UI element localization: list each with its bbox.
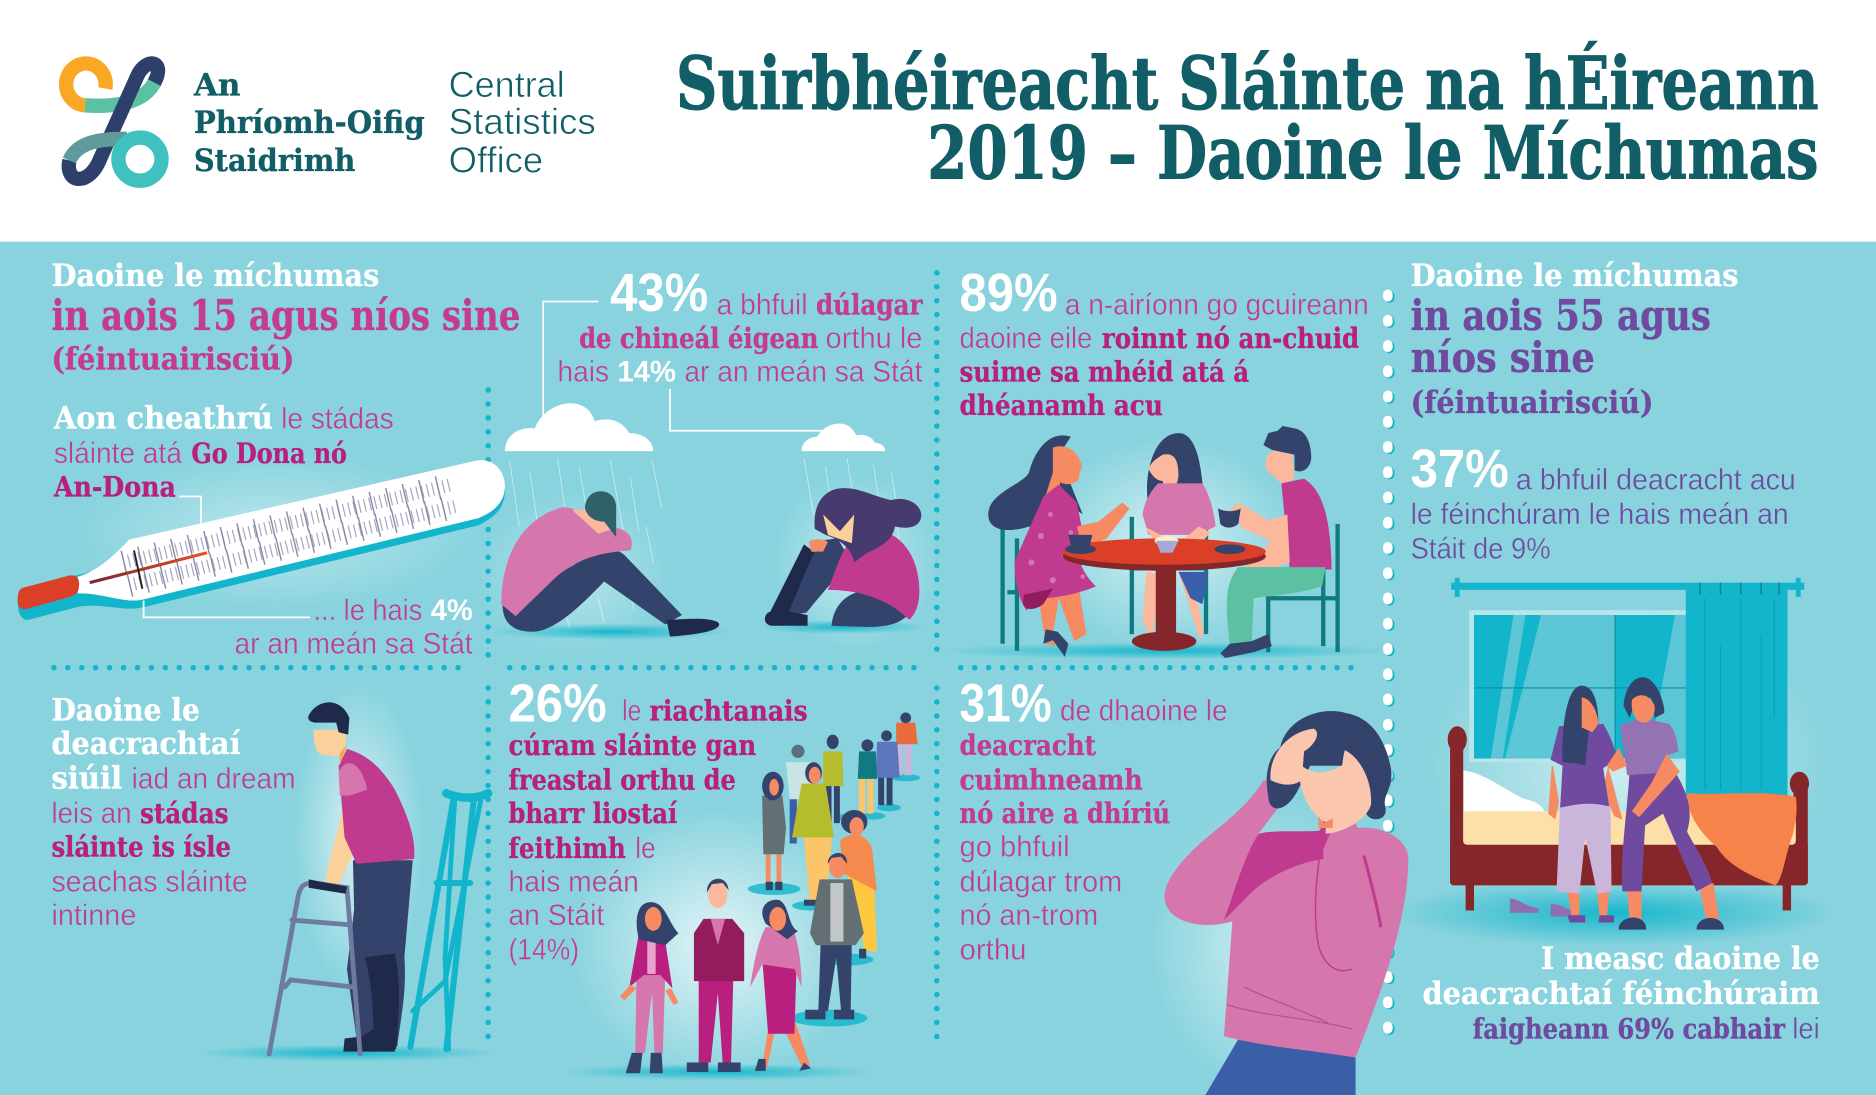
floor spots	[748, 774, 920, 1027]
curtain and rod	[1451, 578, 1804, 796]
text: self-care help: I measc daoine le	[1541, 941, 1820, 977]
illustration: three friends at a table	[939, 426, 1394, 659]
woman left	[988, 435, 1129, 657]
man right	[1218, 426, 1332, 658]
text: walking difficulties: sláinte is ísle	[51, 831, 231, 864]
front woman pink trousers	[620, 902, 678, 1073]
thermometer body	[18, 460, 505, 620]
text: one quarter health status: Go Dona nó	[191, 437, 347, 470]
front man suit	[687, 879, 744, 1072]
text: walking difficulties: leis an	[51, 797, 132, 830]
logo text: Irish: Phríomh-Oifig	[194, 105, 425, 141]
illustration: man with walking frame	[197, 702, 497, 1061]
text: 26 percent waiting lists: le	[622, 694, 641, 727]
text: 89 percent: roinnt nó an-chuid	[1102, 322, 1359, 355]
text: walking difficulties: seachas sláinte	[51, 865, 248, 898]
connector lines	[144, 497, 310, 617]
text: heading 55 and over: in aois 55 agus	[1411, 291, 1711, 340]
text: heading 55 and over: níos sine	[1411, 333, 1595, 382]
text: 26 percent waiting lists: cúram sláinte gan	[508, 729, 756, 762]
text: 26 percent waiting lists: an Stáit	[508, 899, 604, 932]
text: 89 percent: suime sa mhéid atá á	[960, 356, 1249, 389]
woman grey suit	[762, 772, 786, 890]
text: walking difficulties: intinne	[51, 899, 136, 932]
text: 43 percent depression: 14%	[617, 356, 676, 389]
man grey jacket	[805, 853, 864, 1019]
text: heading 15 and over: Daoine le míchumas	[51, 258, 379, 294]
title	[676, 41, 1819, 196]
bed	[1448, 726, 1809, 910]
illustration: woman hugging knees	[760, 488, 927, 634]
text: 89 percent: dhéanamh acu	[960, 389, 1163, 422]
text: walking difficulties: Daoine le	[51, 692, 200, 728]
text: 31 percent memory: deacracht	[960, 729, 1096, 762]
illustration: woman holding her head	[1165, 711, 1408, 1095]
woman orange top	[840, 810, 877, 958]
person	[347, 860, 413, 1047]
logo text: Irish	[193, 68, 425, 179]
front woman magenta skirt	[750, 900, 811, 1071]
logo text: English	[449, 65, 596, 180]
text: 31 percent memory: de dhaoine le	[1060, 694, 1228, 727]
text: heading 55 and over	[1411, 258, 1738, 421]
text: 89 percent: daoine eile	[960, 322, 1092, 355]
text: 43 percent depression: de chineál éigean	[579, 322, 818, 355]
illustration: queue of people	[562, 712, 920, 1080]
text: 89 percent: a n-airíonn go gcuireann	[1065, 289, 1369, 322]
text: compared with 4 percent: ar an meán sa Stát	[234, 627, 473, 660]
text: 43 percent depression	[558, 263, 923, 389]
text: 43 percent depression: a bhfuil	[717, 289, 808, 322]
text: heading 15 and over	[51, 258, 520, 378]
illustration: man sitting in rain	[491, 491, 730, 640]
text: 37 percent self-care: a bhfuil deacracht acu	[1516, 463, 1796, 496]
text: compared with 4 percent: ... le hais	[313, 594, 422, 627]
text: one quarter health status	[53, 400, 394, 504]
text: compared with 4 percent: 4%	[431, 594, 473, 627]
text: walking difficulties: stádas	[140, 797, 229, 830]
text: 26 percent waiting lists: feithimh	[508, 832, 626, 865]
text: 37 percent self-care: le féinchúram le hais meán an	[1411, 498, 1789, 531]
text: 37 percent self-care	[1411, 439, 1796, 566]
logo text: English: Central	[449, 65, 565, 105]
text: 37 percent self-care: 37%	[1411, 439, 1509, 499]
text: one quarter health status: Aon cheathrú	[53, 400, 273, 436]
text: walking difficulties: iad an dream	[132, 762, 296, 795]
text: 43 percent depression: ar an meán sa Stát	[684, 356, 922, 389]
panel: thermometer	[18, 460, 505, 620]
text: heading 15 and over: in aois 15 agus níos sine	[51, 291, 520, 340]
text: 26 percent waiting lists: freastal orthu de	[508, 764, 736, 797]
window	[1469, 610, 1687, 762]
text: one quarter health status: An-Dona	[53, 471, 176, 504]
text: 31 percent memory: nó aire a dhíriú	[960, 797, 1170, 830]
text: self-care help	[1423, 941, 1820, 1046]
white dotted divider	[1388, 294, 1390, 1048]
text: self-care help: lei	[1792, 1013, 1820, 1046]
logo text: English: Statistics	[449, 102, 596, 142]
text: 26 percent waiting lists: 26%	[508, 673, 607, 733]
text: 43 percent depression: orthu le	[826, 322, 922, 355]
woman helping	[1607, 677, 1724, 930]
text: 43 percent depression: 43%	[610, 263, 708, 323]
text: 26 percent waiting lists: (14%)	[508, 934, 579, 967]
back row people	[786, 712, 918, 843]
text: 43 percent depression: hais	[558, 356, 609, 389]
main panel background	[0, 242, 1876, 1095]
woman middle	[1143, 433, 1216, 640]
text: 31 percent memory	[960, 673, 1228, 967]
text: 31 percent memory: go bhfuil	[960, 831, 1070, 864]
logo text: Irish: An	[193, 68, 240, 104]
text: 26 percent waiting lists: le	[635, 832, 656, 865]
text: walking difficulties	[51, 692, 296, 932]
text: 31 percent memory: dúlagar trom	[960, 865, 1122, 898]
text: 89 percent	[960, 263, 1369, 422]
illustration: bedroom with two women	[1394, 578, 1837, 946]
logo text: English: Office	[449, 140, 543, 180]
text: heading 15 and over: (féintuairisciú)	[51, 342, 294, 378]
dotted dividers	[54, 273, 1364, 1039]
header background	[0, 0, 1876, 242]
chairs	[1003, 517, 1338, 652]
logo	[66, 63, 162, 181]
soft background glows	[72, 437, 1831, 1095]
text: 37 percent self-care: Stáit de 9%	[1411, 533, 1551, 566]
logo text: Irish: Staidrimh	[194, 143, 355, 179]
text: compared with 4 percent	[234, 594, 473, 660]
text: 31 percent memory: orthu	[960, 934, 1027, 967]
woman standing	[1548, 686, 1622, 922]
text: 26 percent waiting lists: hais meán	[508, 865, 639, 898]
text: 26 percent waiting lists	[508, 673, 808, 967]
text: heading 55 and over: Daoine le míchumas	[1411, 258, 1738, 294]
text: walking difficulties: deacrachtaí	[51, 726, 241, 762]
man olive jumper	[792, 762, 834, 906]
text: self-care help: deacrachtaí féinchúraim	[1423, 976, 1820, 1012]
text: 26 percent waiting lists: bharr liostaí	[508, 797, 677, 830]
text: 43 percent depression: dúlagar	[816, 289, 923, 322]
text: heading 55 and over: (féintuairisciú)	[1411, 385, 1653, 421]
text: 26 percent waiting lists: riachtanais	[650, 694, 808, 727]
text: 31 percent memory: 31%	[960, 673, 1052, 733]
slippers	[1510, 899, 1579, 916]
text: 31 percent memory: cuimhneamh	[960, 764, 1143, 797]
text: 31 percent memory: nó an-trom	[960, 899, 1098, 932]
walking frame	[269, 883, 360, 1054]
text: walking difficulties: siúil	[51, 760, 122, 796]
text: one quarter health status: sláinte atá	[54, 437, 183, 470]
text: one quarter health status: le stádas	[281, 402, 394, 435]
crutches	[410, 793, 488, 1049]
table	[1062, 535, 1266, 651]
text: self-care help: faigheann 69% cabhair	[1473, 1013, 1786, 1046]
icon: rain clouds and connector lines	[505, 302, 902, 628]
text: 89 percent: 89%	[960, 263, 1058, 323]
